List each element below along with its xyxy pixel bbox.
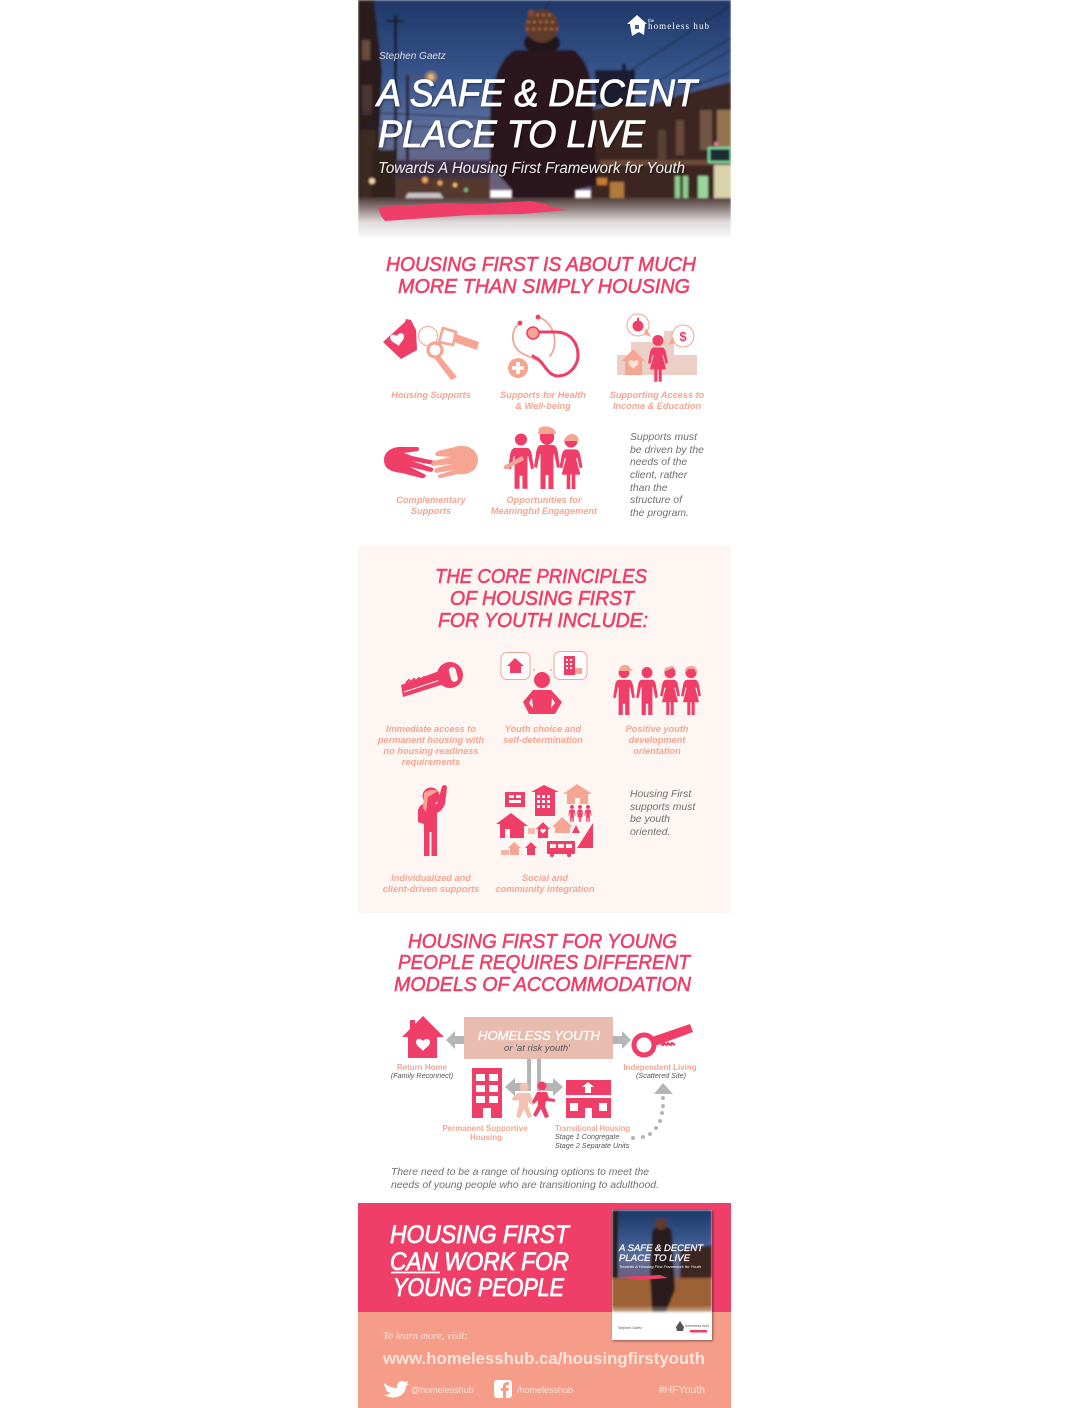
heading: core principles: FOR YOUTH INCLUDE: <box>438 610 648 632</box>
cover title: PLACE TO LIVE <box>619 1253 691 1264</box>
heading: housing first is about much more: MORE THAN SIMPLY HOUSING <box>398 276 690 298</box>
text: supports must be driven <box>630 432 704 519</box>
cover title: homeless hub <box>685 1324 709 1328</box>
heading: different models: PEOPLE REQUIRES DIFFERENT <box>398 952 692 974</box>
icon: community <box>496 784 593 857</box>
cover title: Towards A Housing First Framework for Youth <box>619 1264 702 1269</box>
photo: dusk street with youth seen from behind <box>358 0 731 238</box>
icon: key <box>634 1024 693 1055</box>
logo: the homeless hub: the <box>648 19 655 24</box>
label: Youth choice and <box>505 724 581 734</box>
icon: income and education <box>617 314 697 382</box>
label: return home: (Family Reconnect) <box>391 1071 453 1080</box>
label <box>377 724 484 767</box>
icon: youth choice <box>501 652 587 714</box>
label <box>610 390 705 411</box>
label: no housing readiness <box>384 746 478 756</box>
label: transitional housing: Stage 1 Congregate <box>555 1132 619 1141</box>
heading: housing first can work: YOUNG PEOPLE <box>393 1274 564 1302</box>
heading: different models: HOUSING FIRST FOR YOUNG <box>408 931 677 953</box>
panel: learn more salmon <box>358 1312 731 1408</box>
icon: three people engagement <box>504 426 583 489</box>
arrow: to transitional housing <box>543 1078 563 1096</box>
logo: the homeless hub: homeless hub <box>648 21 710 31</box>
text: range of housing options: There need to be a range of housing options to meet the <box>391 1167 649 1178</box>
text: supports must be driven: be driven by the <box>630 445 704 456</box>
label: Opportunities for <box>506 495 582 505</box>
label: Positive youth <box>626 724 689 734</box>
heading: different models <box>394 931 692 996</box>
icon: apartment building <box>472 1068 502 1118</box>
text: to learn more: To learn more, visit: <box>383 1331 468 1342</box>
icon: person raising hand <box>418 785 447 856</box>
text: twitter handle: @homelesshub <box>411 1385 474 1395</box>
title: PLACE TO LIVE <box>378 114 646 156</box>
text: supports youth oriented: Housing First <box>630 789 692 800</box>
label: permanent supportive housing <box>442 1124 528 1142</box>
label: community integration <box>495 884 595 894</box>
label: permanent supportive housing: Housing <box>470 1133 502 1142</box>
label: Supports for Health <box>500 390 586 400</box>
label: self-determination <box>503 735 583 745</box>
brush stroke <box>378 201 569 221</box>
subtitle: Towards A Housing First Framework for Youth <box>378 160 685 177</box>
panel: call to action pink <box>358 1203 731 1312</box>
icon: house keyring <box>383 319 479 380</box>
diagram: accommodation models <box>391 1016 697 1150</box>
heading: housing first is about much more: HOUSING FIRST IS ABOUT MUCH <box>386 254 697 276</box>
label: return home: Return Home <box>397 1063 448 1072</box>
panel: core principles <box>358 545 731 913</box>
label: Income & Education <box>613 401 702 411</box>
label <box>500 390 586 411</box>
fade to white <box>358 200 731 240</box>
label: transitional housing: Transitional Housing <box>555 1124 630 1133</box>
label: permanent supportive housing: Permanent Supportive <box>442 1124 528 1133</box>
box: homeless youth: HOMELESS YOUTH <box>478 1028 601 1043</box>
label: permanent housing with <box>377 735 484 745</box>
label: client-driven supports <box>383 884 479 894</box>
arrow: dotted path <box>631 1083 673 1140</box>
cover photo <box>612 1210 712 1312</box>
icon: transitional housing <box>566 1080 611 1118</box>
text: supports must be driven: than the <box>630 483 668 494</box>
label <box>396 495 467 516</box>
heading: housing first is about much more <box>386 254 697 298</box>
logo: the homeless hub <box>627 15 710 36</box>
label <box>503 724 583 745</box>
box: homeless youth <box>464 1017 613 1059</box>
text: supports must be driven: structure of <box>630 495 683 506</box>
icon: twitter <box>384 1381 409 1397</box>
icon: income and education: $ <box>679 329 687 344</box>
label: Individualized and <box>391 873 471 883</box>
label: Supports <box>411 506 451 516</box>
text: supports youth oriented <box>630 789 696 838</box>
heading: core principles <box>435 566 648 632</box>
label: independent living <box>623 1063 697 1080</box>
text: supports must be driven: Supports must <box>630 432 698 443</box>
text: supports must be driven: the program. <box>630 508 689 519</box>
label: Housing Supports <box>391 390 471 400</box>
text: supports must be driven: needs of the <box>630 457 687 468</box>
heading: housing first can work <box>390 1221 571 1302</box>
text: supports must be driven: client, rather <box>630 470 688 481</box>
author name: Stephen Gaetz <box>379 51 446 62</box>
vertical connector bars <box>527 1059 541 1091</box>
heading: core principles: OF HOUSING FIRST <box>450 588 636 610</box>
label: transitional housing: Stage 2 Separate Units <box>555 1141 630 1150</box>
text: range of housing options <box>391 1167 659 1191</box>
label: orientation <box>633 746 681 756</box>
text: url: www.homelesshub.ca/housingfirstyouth <box>382 1349 705 1368</box>
label: & Well-being <box>515 401 571 411</box>
label: requirements <box>402 757 460 767</box>
label <box>626 724 689 756</box>
label: Supporting Access to <box>610 390 705 400</box>
text: supports youth oriented: supports must <box>630 802 696 813</box>
icon: key <box>401 662 463 697</box>
heading: housing first can work: HOUSING FIRST <box>390 1221 571 1249</box>
label: transitional housing <box>555 1124 630 1150</box>
icon: stethoscope <box>508 315 578 378</box>
text: hashtag: #HFYouth <box>659 1384 705 1396</box>
label: Immediate access to <box>386 724 476 734</box>
heading: core principles: THE CORE PRINCIPLES <box>435 566 648 588</box>
label: development <box>629 735 686 745</box>
label: independent living: Independent Living <box>623 1063 697 1072</box>
arrow: to supportive housing <box>505 1078 525 1096</box>
text: facebook handle: /homelesshub <box>517 1385 573 1395</box>
icon: house with heart <box>402 1016 444 1058</box>
arrow: to independent living <box>613 1031 631 1049</box>
label <box>495 873 595 894</box>
title: A SAFE & DECENT <box>375 73 700 115</box>
label: Meaningful Engagement <box>491 506 598 516</box>
label: independent living: (Scattered Site) <box>636 1071 686 1080</box>
heading: housing first can work: CAN WORK FOR <box>390 1248 569 1276</box>
icon: facebook <box>494 1380 512 1398</box>
cover title: Stephen Gaetz <box>618 1326 642 1330</box>
icon: four youth <box>613 665 701 715</box>
icon: two figures walking <box>512 1082 555 1118</box>
label: Complementary <box>396 495 467 505</box>
heading: different models: MODELS OF ACCOMMODATION <box>394 974 692 996</box>
cover title: A SAFE & DECENT <box>618 1243 704 1254</box>
text: range of housing options: needs of young people who are transitioning to adulthood. <box>391 1180 659 1191</box>
panel: hero photo header <box>358 0 731 240</box>
title <box>375 73 700 156</box>
icon: handshake <box>384 446 478 478</box>
arrow: to return home <box>446 1031 464 1049</box>
label <box>383 873 479 894</box>
text: supports youth oriented: oriented. <box>630 827 670 838</box>
cover title <box>618 1243 709 1332</box>
text: supports youth oriented: be youth <box>630 814 670 825</box>
label <box>491 495 598 516</box>
box: homeless youth: or 'at risk youth' <box>504 1043 571 1054</box>
label: Social and <box>522 873 568 883</box>
report cover <box>612 1210 712 1340</box>
label: return home <box>391 1063 453 1080</box>
